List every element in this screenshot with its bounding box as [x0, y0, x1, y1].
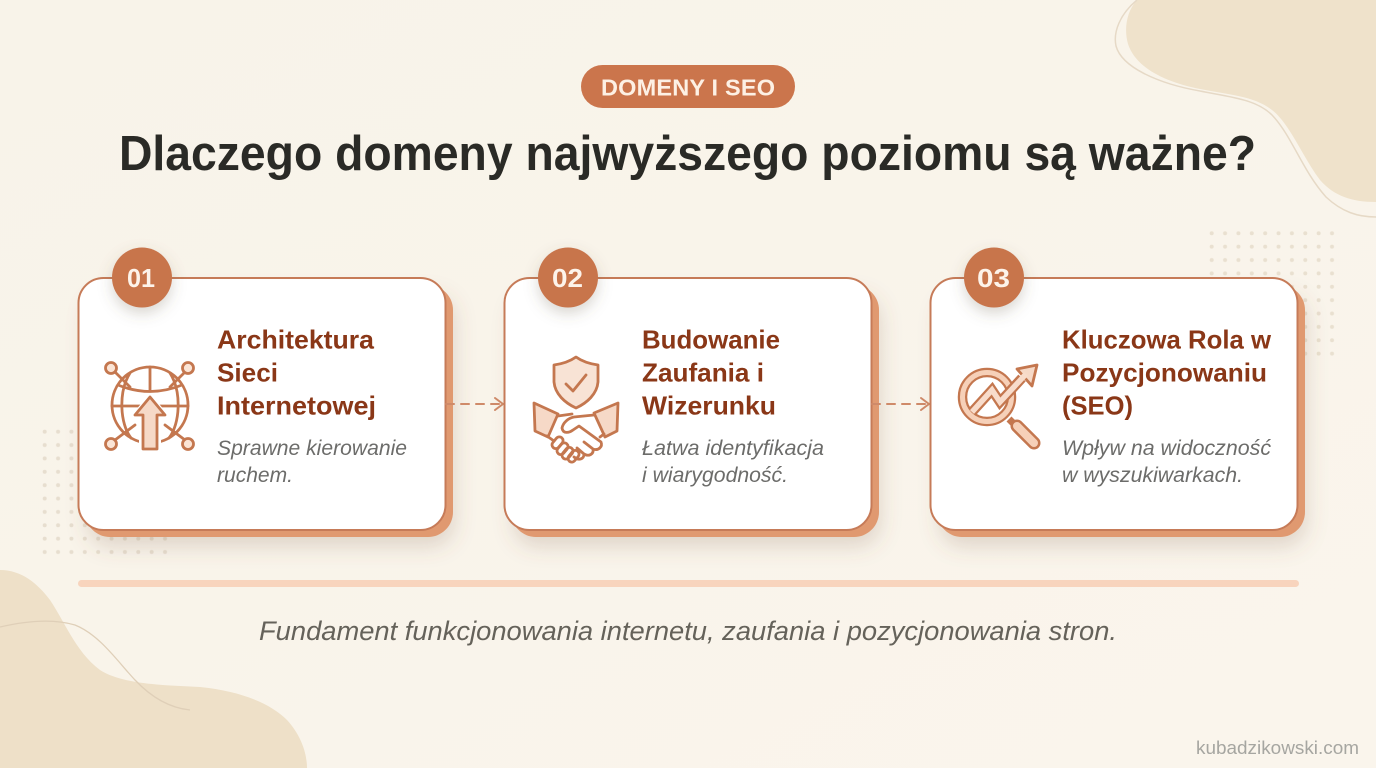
icon: magnifier with growth arrow — [962, 365, 1037, 443]
badge 02: 02 — [552, 263, 583, 293]
badge 01 — [112, 248, 172, 308]
card 3 heading — [1062, 324, 1272, 420]
card 2 description — [642, 436, 824, 487]
card 3 heading: (SEO) — [1062, 390, 1133, 420]
card 3 heading: Pozycjonowaniu — [1062, 358, 1267, 388]
arrow: card 1 to card 2 — [446, 398, 503, 410]
title: Dlaczego domeny najwyższego poziomu są ważne? — [119, 126, 1256, 181]
summary line: Fundament funkcjonowania internetu, zaufania i pozycjonowania stron. — [259, 616, 1117, 646]
dot grid: left — [38, 425, 172, 559]
panel: card 1 — [78, 248, 453, 537]
card 2 description: Łatwa identyfikacja — [642, 436, 824, 460]
badge 03 — [964, 248, 1024, 308]
card 2 description: i wiarygodność. — [642, 463, 788, 487]
card 3 description: Wpływ na widoczność — [1062, 436, 1271, 460]
decorative blob: bottom left — [0, 570, 307, 768]
card 3 description — [1062, 436, 1271, 487]
icon: globe with arrow — [106, 362, 194, 453]
card 2 heading — [642, 324, 780, 420]
badge 03: 03 — [977, 263, 1010, 293]
card 1 description: Sprawne kierowanie — [217, 436, 407, 460]
card 1 heading: Internetowej — [217, 390, 376, 420]
card 1 heading: Architektura — [217, 324, 375, 354]
tag pill: DOMENY I SEO — [601, 74, 775, 100]
card 1 heading — [217, 324, 376, 420]
divider bar — [78, 580, 1299, 587]
badge 02 — [538, 248, 598, 308]
card 1 description — [217, 436, 407, 487]
card 2 heading: Wizerunku — [642, 390, 776, 420]
card 1 description: ruchem. — [217, 463, 293, 487]
card 2 heading: Zaufania i — [642, 358, 764, 388]
panel: card 3 — [930, 248, 1305, 537]
panel: card 2 — [504, 248, 879, 537]
dot grid: right — [1205, 227, 1339, 360]
icon: shield and handshake — [534, 357, 618, 464]
card 3 description: w wyszukiwarkach. — [1062, 463, 1243, 487]
decorative blob: top right — [1115, 0, 1376, 217]
arrow: card 2 to card 3 — [872, 398, 929, 410]
card 3 heading: Kluczowa Rola w — [1062, 324, 1272, 354]
badge 01: 01 — [127, 263, 155, 293]
watermark: kubadzikowski.com — [1196, 737, 1359, 758]
tag pill — [581, 65, 795, 108]
card 2 heading: Budowanie — [642, 324, 780, 354]
card 1 heading: Sieci — [217, 358, 278, 388]
